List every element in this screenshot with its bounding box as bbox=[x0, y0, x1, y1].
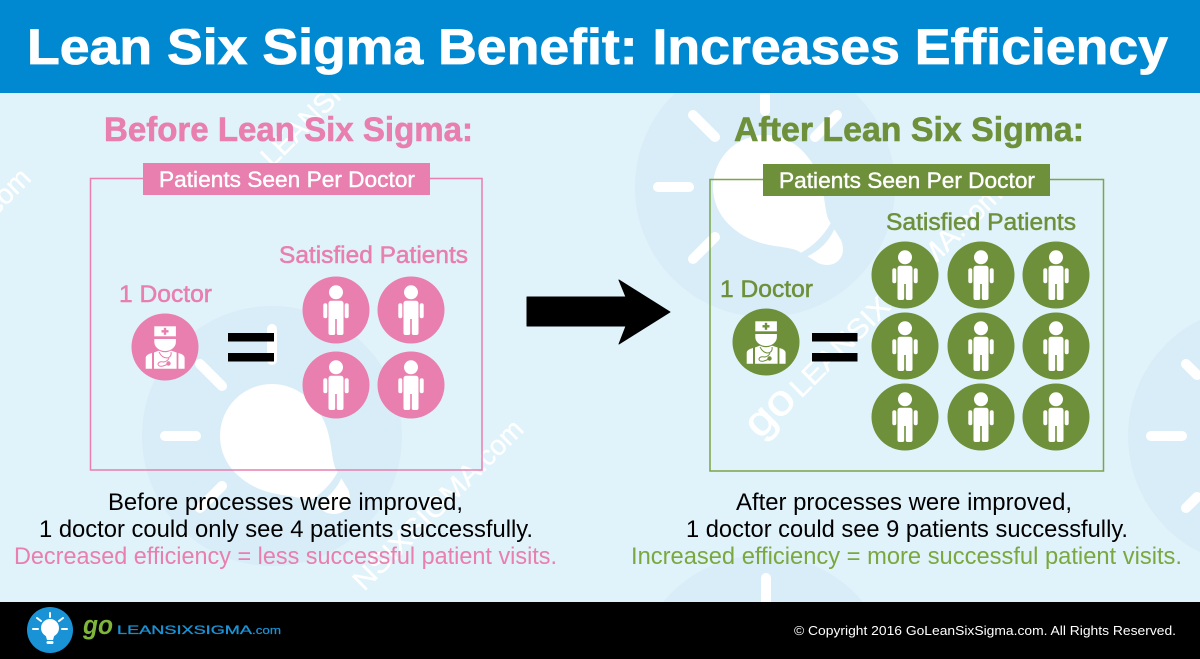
header band bbox=[0, 0, 1200, 93]
text: after description bbox=[631, 489, 1182, 570]
text: before description: Decreased efficiency = less successful patient visits. bbox=[14, 543, 557, 570]
panel: before bbox=[14, 111, 557, 570]
watermark: lightbulb far right bbox=[1128, 320, 1200, 552]
title: Lean Six Sigma Benefit: Increases Efficiency bbox=[27, 19, 1168, 75]
frame: after bbox=[710, 180, 1104, 471]
label: patients seen per doctor: Patients Seen Per Doctor bbox=[779, 168, 1035, 193]
label: 1 doctor: 1 Doctor bbox=[720, 276, 813, 303]
watermark: lightbulb top right bbox=[635, 57, 895, 317]
icon: doctor bbox=[732, 308, 800, 376]
watermark text: lower left bbox=[346, 413, 529, 596]
watermark: lightbulb bottom bbox=[663, 555, 863, 602]
label: satisfied patients: Satisfied Patients bbox=[279, 242, 468, 269]
watermark text: right: LEANSIXSIGMA bbox=[783, 221, 966, 403]
icons: 4 patients bbox=[302, 276, 444, 418]
frame: before bbox=[90, 178, 482, 470]
watermark text: top center: LEANSI bbox=[254, 80, 347, 172]
label: patients seen per doctor: Patients Seen Per Doctor bbox=[159, 167, 415, 192]
label: satisfied patients: Satisfied Patients bbox=[886, 209, 1076, 236]
label: patients seen per doctor bbox=[763, 164, 1050, 196]
icon: doctor bbox=[132, 314, 198, 380]
label: 1 doctor: 1 Doctor bbox=[119, 281, 212, 308]
logo wordmark bbox=[82, 610, 281, 640]
icon: equals bbox=[228, 333, 274, 362]
logo wordmark: .com bbox=[252, 625, 281, 637]
text: after description: After processes were improved, bbox=[736, 489, 1072, 516]
text: before description bbox=[14, 489, 557, 570]
arrow bbox=[527, 280, 670, 344]
icons: 9 patients bbox=[872, 242, 1090, 450]
label: patients seen per doctor bbox=[143, 163, 430, 195]
text: before description: Before processes were improved, bbox=[108, 489, 463, 516]
heading: before: Before Lean Six Sigma: bbox=[104, 111, 473, 149]
watermark text: right: go bbox=[733, 375, 805, 446]
heading: after: After Lean Six Sigma: bbox=[734, 111, 1084, 149]
watermark: lightbulb left bbox=[142, 306, 402, 566]
copyright: © Copyright 2016 GoLeanSixSigma.com. All Rights Reserved. bbox=[794, 623, 1176, 638]
logo wordmark: go bbox=[82, 610, 113, 640]
logo wordmark: LEANSIXSIGMA bbox=[117, 623, 252, 637]
watermark text: lower left: NSIXSIGMA bbox=[346, 455, 487, 596]
footer band bbox=[0, 602, 1200, 659]
watermark text: right bbox=[733, 169, 1010, 446]
text: after description: 1 doctor could see 9 patients successfully. bbox=[686, 516, 1128, 543]
watermark text: right: .com bbox=[944, 178, 1008, 243]
logo icon: lightbulb bbox=[27, 607, 73, 653]
panel: after bbox=[631, 111, 1182, 570]
icon: equals bbox=[812, 333, 858, 362]
watermark text: lower left: .com bbox=[465, 413, 529, 477]
text: after description: Increased efficiency = more successful patient visits. bbox=[631, 543, 1182, 570]
text: before description: 1 doctor could only see 4 patients successfully. bbox=[39, 516, 533, 543]
